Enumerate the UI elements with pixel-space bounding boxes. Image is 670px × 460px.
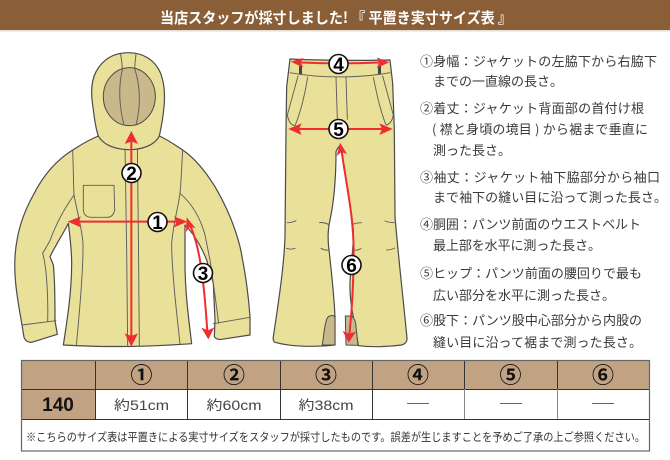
marker 6: 6 xyxy=(346,256,357,277)
measure 6: inseam arrow xyxy=(337,143,356,343)
description 2: 測った長さ。 xyxy=(433,140,511,159)
hood opening xyxy=(103,68,155,126)
size row: 約60cm xyxy=(206,398,262,413)
description 4: ④胴囲：パンツ前面のウエストベルト xyxy=(420,214,641,233)
description 1 xyxy=(420,51,657,90)
measure 2: length arrow xyxy=(125,131,138,347)
size row: 約38cm xyxy=(298,398,354,413)
table header row: ③ xyxy=(315,358,337,390)
hem gussets xyxy=(322,315,358,345)
marker 1: 1 xyxy=(152,213,163,234)
title bar xyxy=(0,0,670,32)
title bar: 当店スタッフが採寸しました! 『 平置き実寸サイズ表 』 xyxy=(160,7,512,28)
description 4: 最上部を水平に測った長さ。 xyxy=(433,235,601,254)
table header row: ④ xyxy=(407,358,429,390)
description 3 xyxy=(420,167,667,206)
description 6: ⑥股下：パンツ股中心部分から内股の xyxy=(420,310,642,329)
hood seams xyxy=(120,54,139,125)
measure 4: waist arrow xyxy=(291,57,389,68)
description 1: ①身幅：ジャケットの左脇下から右脇下 xyxy=(420,51,657,70)
jacket hood xyxy=(92,53,165,150)
description 5: ⑤ヒップ：パンツ前面の腰回りで最も xyxy=(420,263,642,282)
pants outline xyxy=(273,59,407,347)
table header row: ⑤ xyxy=(499,358,522,390)
jacket pocket xyxy=(83,185,115,217)
size row: 約51cm xyxy=(114,398,169,413)
jacket body and sleeves xyxy=(15,136,250,347)
size table xyxy=(21,358,650,451)
table grid xyxy=(22,360,650,451)
marker 2 xyxy=(122,164,141,185)
marker 5: 5 xyxy=(333,120,344,141)
description 3: ③袖丈：ジャケット袖下脇部分から袖口 xyxy=(420,167,660,186)
measure 5: hip arrow xyxy=(288,123,393,135)
jacket illustration xyxy=(15,53,250,347)
marker 4: 4 xyxy=(333,55,344,76)
description 2 xyxy=(420,98,648,159)
description 4 xyxy=(420,214,641,254)
measure 1: width arrow xyxy=(68,216,187,227)
marker 1 xyxy=(148,212,167,234)
description 2: ( 襟と身頃の境目 ) から裾まで垂直に xyxy=(432,119,648,138)
marker 5 xyxy=(329,120,348,141)
description 5: 広い部分を水平に測った長さ。 xyxy=(433,285,615,304)
marker 3: 3 xyxy=(198,264,208,285)
marker 4 xyxy=(329,54,348,76)
description 2: ②着丈：ジャケット背面部の首付け根 xyxy=(420,98,644,117)
size row: 140 xyxy=(42,395,74,416)
marker 3 xyxy=(194,264,212,285)
table header row: ① xyxy=(130,358,153,390)
measure 3: sleeve arrow xyxy=(186,217,214,339)
description 1: までの一直線の長さ。 xyxy=(433,71,563,90)
size row xyxy=(21,389,614,419)
table header row: ⑥ xyxy=(592,358,614,390)
pants seams xyxy=(287,73,395,250)
marker 6 xyxy=(342,256,361,277)
table header row: ② xyxy=(223,358,245,390)
pants illustration xyxy=(273,59,407,347)
description 5 xyxy=(420,263,642,304)
marker 2: 2 xyxy=(126,164,137,185)
description 3: まで袖下の縫い目に沿って測った長さ。 xyxy=(433,187,667,206)
description 6: 縫い目に沿って裾まで測った長さ。 xyxy=(433,332,642,351)
belt loops xyxy=(299,66,381,74)
jacket seams xyxy=(22,145,250,346)
description 6 xyxy=(420,310,642,351)
table header row xyxy=(21,358,649,390)
